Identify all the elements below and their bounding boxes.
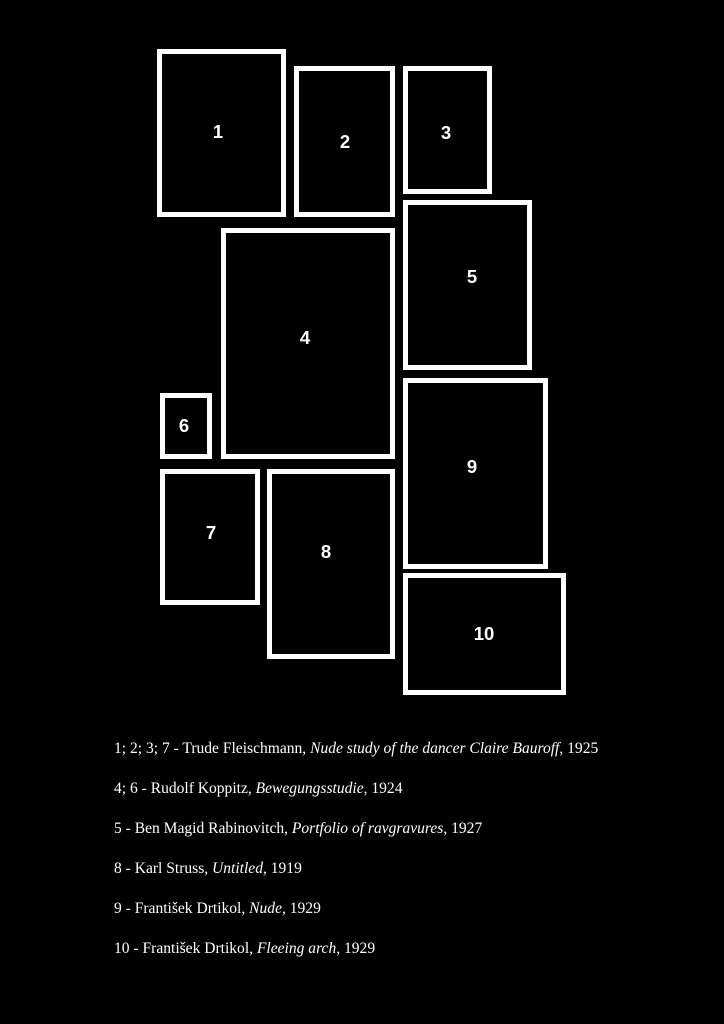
number 10: 10 xyxy=(474,623,494,644)
frame 3 xyxy=(403,66,492,194)
number 3: 3 xyxy=(441,122,451,143)
caption: Rudolf Koppitz: 4; 6 - Rudolf Koppitz, Bewegungsstudie, 1924 xyxy=(114,780,402,797)
frame 4 xyxy=(221,228,395,459)
caption: František Drtikol, Nude: 9 - František Drtikol, Nude, 1929 xyxy=(114,900,321,917)
frame 6 xyxy=(160,393,212,459)
frame 5 xyxy=(403,200,532,370)
number 6: 6 xyxy=(179,415,189,436)
caption: Trude Fleischmann: 1; 2; 3; 7 - Trude Fleischmann, Nude study of the dancer Claire Bauroff, 1925 xyxy=(114,740,598,757)
number 7: 7 xyxy=(206,522,216,543)
frame 1 xyxy=(157,49,286,217)
caption: Ben Magid Rabinovitch: 5 - Ben Magid Rabinovitch, Portfolio of ravgravures, 1927 xyxy=(114,820,482,837)
frame 8 xyxy=(267,469,395,659)
number 4: 4 xyxy=(300,327,310,348)
number 9: 9 xyxy=(467,456,477,477)
number 8: 8 xyxy=(321,541,331,562)
caption: František Drtikol, Fleeing arch: 10 - František Drtikol, Fleeing arch, 1929 xyxy=(114,940,375,957)
frame 10 xyxy=(403,573,566,695)
caption: Karl Struss: 8 - Karl Struss, Untitled, 1919 xyxy=(114,860,302,877)
frame 9 xyxy=(403,378,548,569)
frame 7 xyxy=(160,469,260,605)
number 2: 2 xyxy=(340,131,350,152)
number 5: 5 xyxy=(467,266,477,287)
frame 2 xyxy=(294,66,395,217)
number 1: 1 xyxy=(213,121,223,142)
